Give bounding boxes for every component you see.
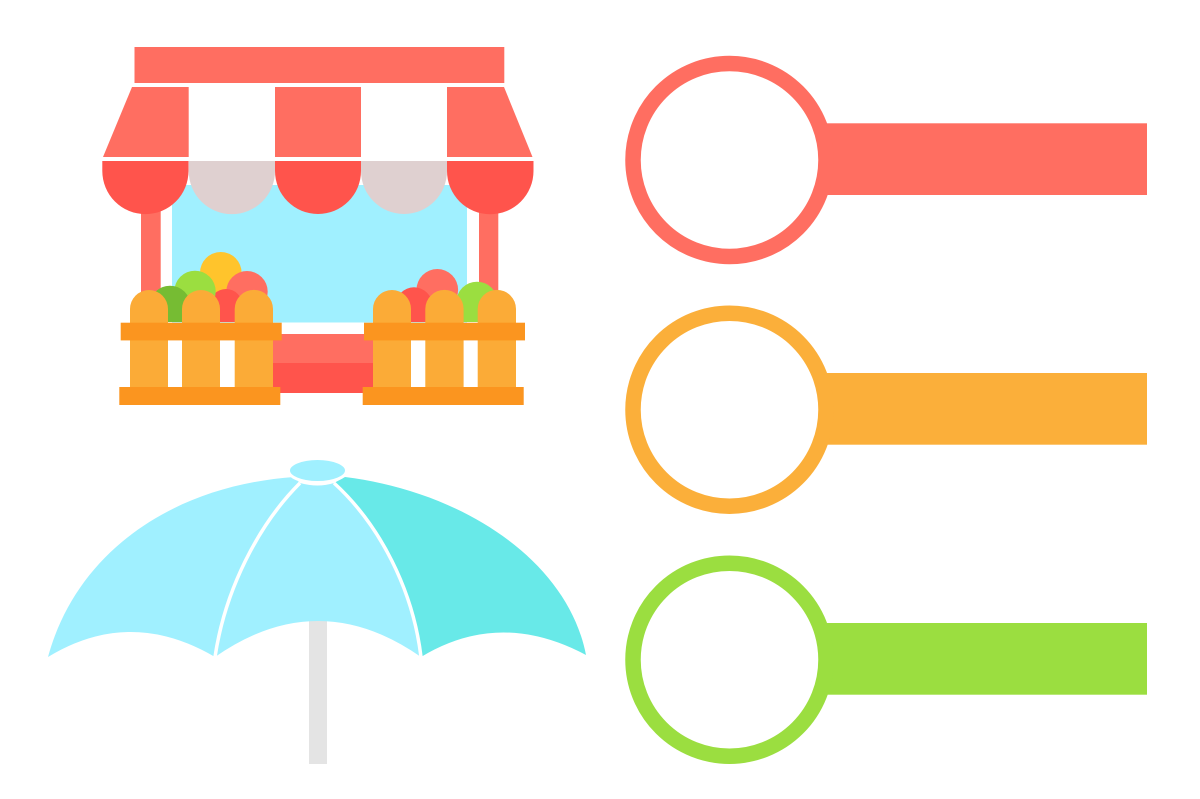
green bar [822, 623, 1147, 695]
label: orange [633, 313, 1147, 506]
canopy right panel [334, 477, 586, 657]
coral ring [633, 64, 826, 256]
awning top bar [134, 47, 504, 83]
left fruit pile [149, 252, 268, 322]
green ring [633, 563, 826, 756]
stall window [172, 185, 467, 322]
right post [479, 200, 498, 295]
coral bar [822, 123, 1147, 195]
label: green [633, 563, 1147, 756]
orange ring [633, 313, 826, 506]
left fence [119, 290, 282, 405]
right fruit pile [396, 269, 498, 322]
orange bar [822, 373, 1147, 445]
umbrella ribs [215, 483, 421, 657]
umbrella cap [288, 458, 346, 482]
icon: market stall [102, 47, 534, 405]
umbrella pole [309, 618, 327, 764]
label: coral [633, 64, 1147, 256]
canopy centre panel [215, 483, 421, 657]
steps [273, 334, 373, 393]
awning scallops [102, 161, 534, 214]
awning stripes [103, 87, 532, 157]
icon: beach umbrella [48, 458, 586, 764]
left post [141, 200, 161, 295]
canopy left panel [48, 477, 300, 657]
right fence [363, 290, 525, 405]
